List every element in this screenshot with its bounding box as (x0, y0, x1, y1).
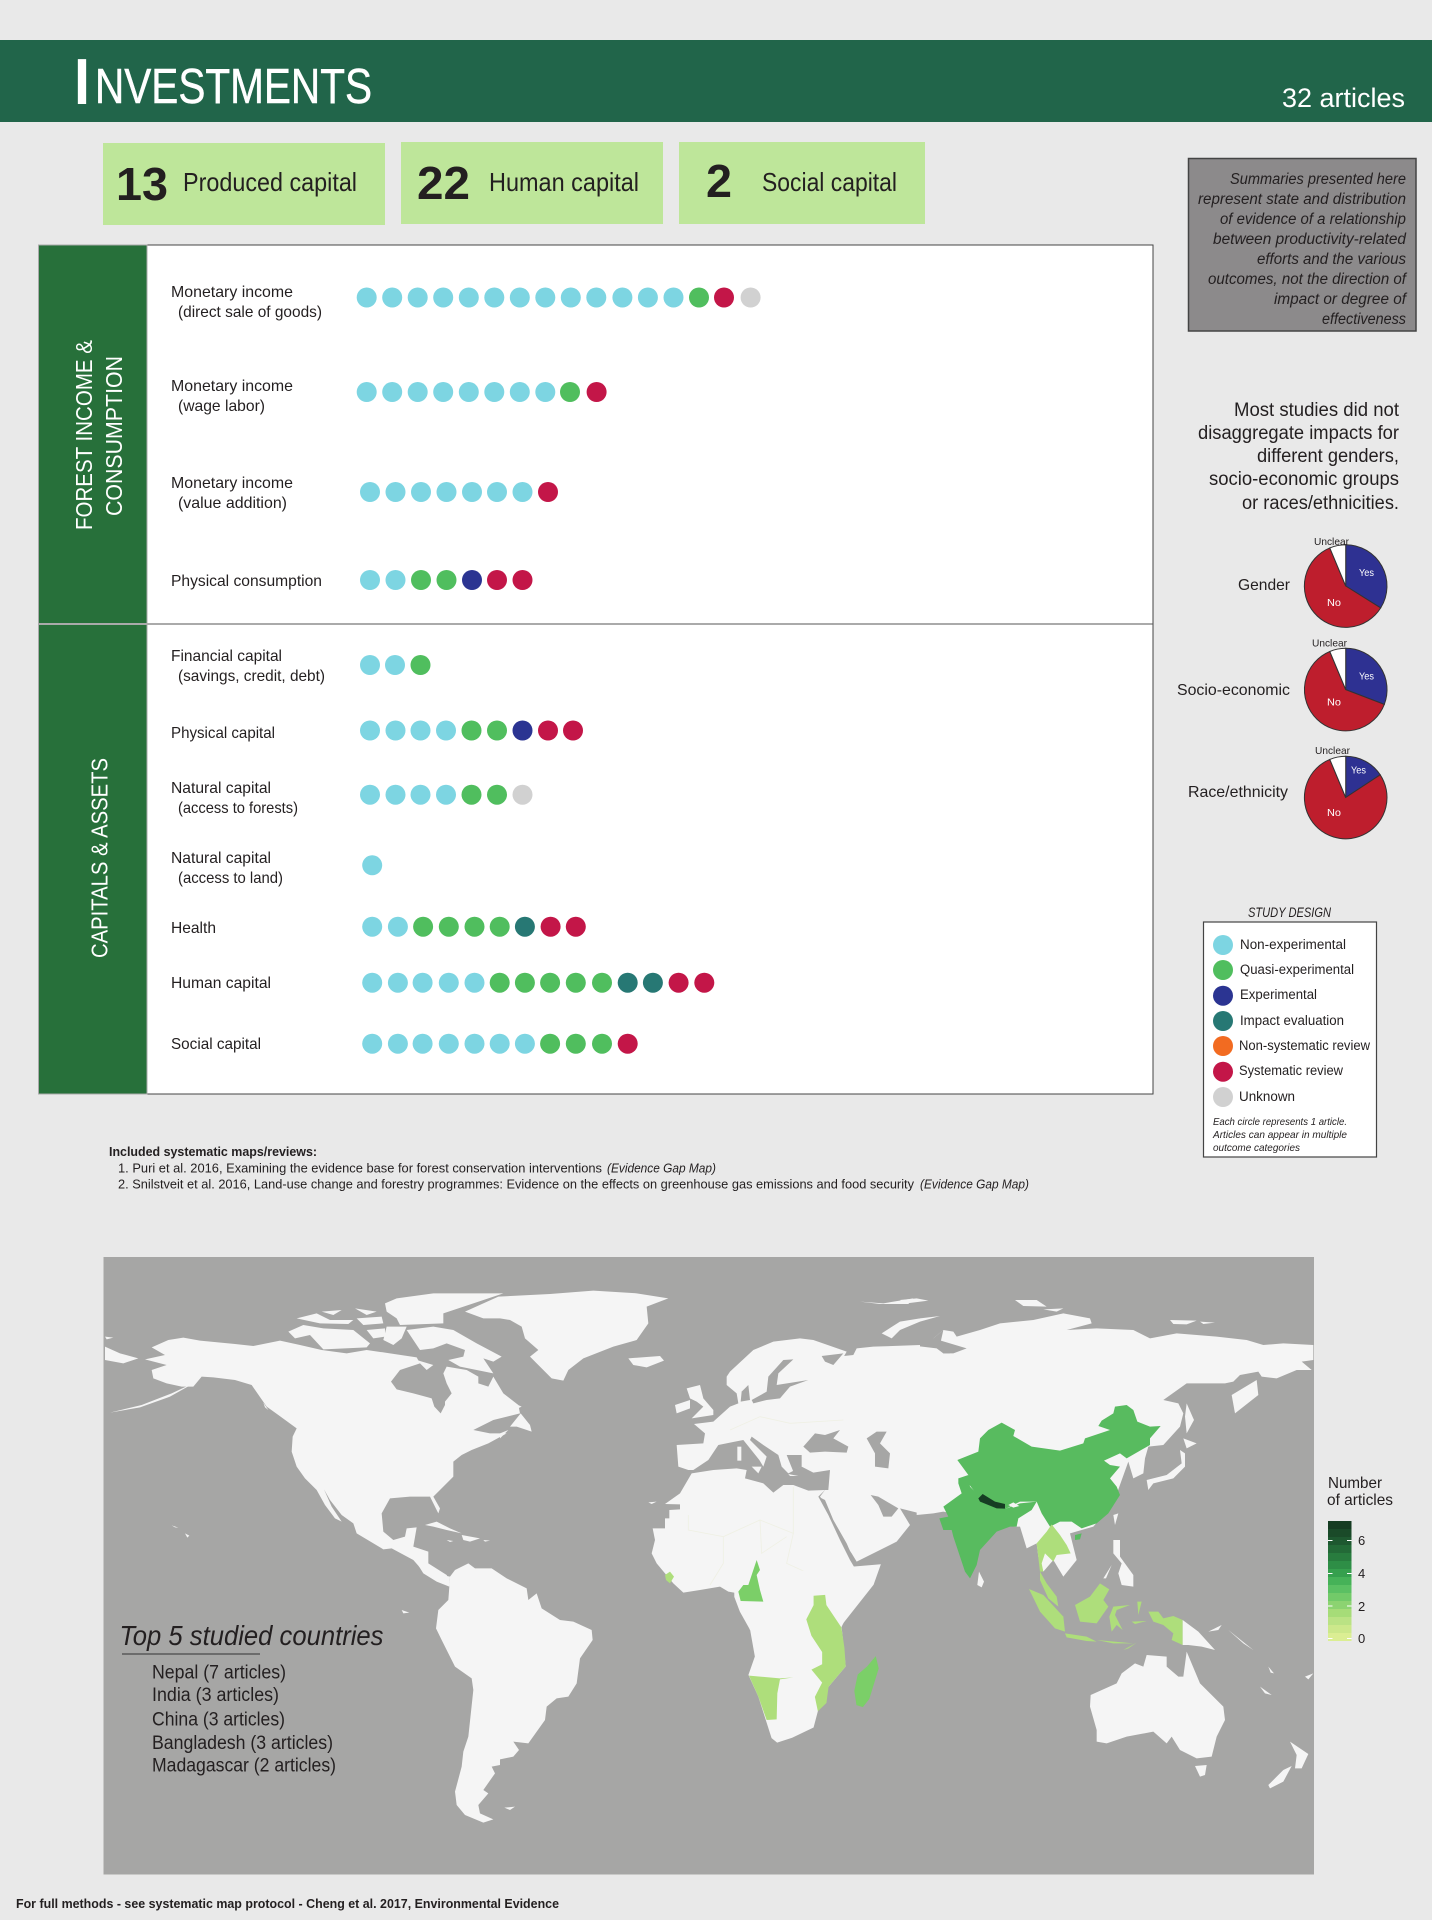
stat box: social capital: Social capital (762, 167, 897, 197)
colour scale: number of articles (1327, 1475, 1393, 1646)
row: monetary income direct sale (171, 284, 761, 321)
map: Greenland, Europe, Africa north, Middle East (465, 1291, 920, 1630)
map: Indonesia and Oceania (1029, 1583, 1313, 1788)
row: monetary income wage labor: (wage labor) (178, 398, 265, 415)
pie chart: race and ethnicity: No (1327, 807, 1341, 819)
map: Asia mainland (917, 1313, 1313, 1577)
row: natural capital forests: (access to forests) (178, 800, 298, 817)
row: financial capital: (savings, credit, debt) (178, 668, 325, 685)
row: physical capital (171, 720, 583, 742)
colour scale: number of articles: 2 (1358, 1599, 1365, 1614)
map: Africa south (734, 1564, 881, 1743)
pie chart: socio-economic: No (1327, 696, 1341, 708)
category: forest income and consumption: CONSUMPTION (101, 356, 127, 516)
map: Sierra Leone and Cameroon (665, 1560, 763, 1602)
included systematic maps and reviews: (Evidence Gap Map) (607, 1160, 716, 1176)
stat box: social capital: 2 (706, 155, 732, 207)
row: social capital (171, 1034, 638, 1054)
legend: study design (1204, 905, 1376, 1157)
map: Nepal (978, 1494, 1005, 1509)
colour scale: number of articles: 0 (1358, 1631, 1365, 1646)
title: NVESTMENTS (95, 60, 372, 114)
evidence table panel (38, 245, 1153, 1094)
row: monetary income direct sale: Monetary income (171, 284, 293, 301)
footer: methods note: For full methods - see systematic map protocol - Cheng et al. 2017, Environmental Evidence (16, 1896, 559, 1911)
category: forest income and consumption: FOREST INCOME & (71, 340, 97, 530)
pie chart: socio-economic: Socio-economic (1177, 682, 1290, 699)
pie chart: socio-economic: Yes (1359, 670, 1374, 682)
colour scale: number of articles: 4 (1358, 1566, 1365, 1581)
pie chart: race and ethnicity: Race/ethnicity (1188, 784, 1288, 801)
pie chart: gender: No (1327, 597, 1341, 609)
disaggregation statement: different genders, (1257, 446, 1399, 467)
row: natural capital forests (171, 780, 532, 817)
legend: study design: Unknown (1239, 1089, 1295, 1104)
top 5 studied countries: India (3 articles) (152, 1685, 279, 1706)
included systematic maps and reviews: Included systematic maps/reviews: (109, 1144, 317, 1159)
map: Americas north (105, 1293, 520, 1582)
legend: study design: Non-experimental (1240, 937, 1346, 952)
stat box: produced capital (103, 143, 385, 225)
row: natural capital land: (access to land) (178, 870, 283, 887)
top 5 studied countries: Madagascar (2 articles) (152, 1756, 336, 1776)
row: monetary income value addition: Monetary income (171, 475, 293, 492)
row: natural capital land (171, 850, 382, 887)
map: China (957, 1405, 1161, 1540)
row: physical capital: Physical capital (171, 725, 275, 742)
callout: summaries note: Summaries presented here (1230, 171, 1406, 188)
row: physical consumption (171, 570, 532, 590)
pie chart: socio-economic: Unclear (1312, 638, 1347, 650)
legend: study design: Experimental (1240, 987, 1317, 1002)
header band (0, 40, 1432, 122)
category: forest income and consumption (38, 245, 147, 624)
row: financial capital (171, 648, 430, 685)
row: monetary income direct sale: (direct sale of goods) (178, 304, 322, 321)
colour scale: number of articles: 6 (1358, 1533, 1365, 1548)
callout: summaries note: between productivity-related (1213, 231, 1407, 248)
callout: summaries note: effectiveness (1322, 311, 1406, 328)
row: monetary income wage labor (171, 378, 607, 415)
row: physical consumption: Physical consumption (171, 573, 322, 590)
stat box: produced capital: Produced capital (183, 167, 357, 197)
included systematic maps and reviews: 1. Puri et al. 2016, Examining the evidence base for forest conservation interventions (118, 1160, 602, 1176)
legend: study design: outcome categories (1213, 1142, 1301, 1154)
legend: study design: Each circle represents 1 article. (1213, 1116, 1347, 1128)
pie chart: gender: Yes (1359, 567, 1374, 579)
pie chart: gender: Unclear (1314, 536, 1349, 548)
pie chart: race and ethnicity (1188, 745, 1387, 839)
disaggregation statement: disaggregate impacts for (1198, 423, 1400, 444)
article count: 32 articles (1282, 83, 1405, 113)
callout: summaries note: efforts and the various (1257, 251, 1406, 268)
top 5 studied countries: China (3 articles) (152, 1710, 285, 1730)
disaggregation statement: Most studies did not (1234, 400, 1400, 421)
row: health (171, 917, 586, 937)
row: human capital: Human capital (171, 975, 271, 992)
top 5 studied countries: Nepal (7 articles) (152, 1662, 286, 1684)
row: monetary income wage labor: Monetary income (171, 378, 293, 395)
callout: summaries note: outcomes, not the direction of (1208, 271, 1408, 288)
disaggregation statement (1198, 400, 1400, 514)
map: India (939, 1475, 1037, 1578)
row: natural capital land: Natural capital (171, 850, 271, 867)
row: natural capital forests: Natural capital (171, 780, 271, 797)
pie chart: race and ethnicity: Unclear (1315, 745, 1350, 757)
row: financial capital: Financial capital (171, 648, 282, 665)
callout: summaries note: impact or degree of (1274, 291, 1408, 308)
stat box: human capital (401, 142, 663, 224)
legend: study design: Systematic review (1239, 1063, 1343, 1078)
colour scale: number of articles: Number (1328, 1475, 1383, 1492)
callout: summaries note (1188, 158, 1416, 331)
top 5 studied countries: Top 5 studied countries (120, 1620, 384, 1651)
map: Namibia (749, 1676, 793, 1720)
legend: study design: Non-systematic review (1239, 1038, 1370, 1053)
stat box: produced capital: 13 (116, 158, 168, 210)
map: South America (402, 1560, 593, 1823)
title (76, 48, 372, 117)
included systematic maps and reviews: 2. Snilstveit et al. 2016, Land-use change and forestry programmes: Evidence on the effects on greenhouse gas emissions and food security (118, 1176, 914, 1192)
legend: study design: Impact evaluation (1240, 1013, 1344, 1028)
legend: study design: Quasi-experimental (1240, 962, 1354, 977)
row: monetary income value addition (171, 475, 558, 512)
map: mainland Southeast Asia (1037, 1524, 1071, 1572)
row: human capital (171, 973, 714, 993)
top 5 studied countries: Bangladesh (3 articles) (152, 1733, 333, 1754)
row: monetary income value addition: (value addition) (178, 495, 287, 512)
pie chart: gender (1238, 536, 1387, 627)
colour scale: number of articles: of articles (1327, 1492, 1393, 1509)
pie chart: gender: Gender (1238, 577, 1291, 594)
callout: summaries note: of evidence of a relationship (1220, 211, 1406, 228)
category: capitals and assets (38, 624, 147, 1094)
world map (104, 1257, 1314, 1874)
legend: study design: STUDY DESIGN (1248, 905, 1331, 920)
stat box: human capital: 22 (417, 157, 470, 209)
legend: study design: Articles can appear in multiple (1212, 1129, 1347, 1141)
map: Asia countries and islands (900, 1298, 1258, 1607)
pie chart: race and ethnicity: Yes (1351, 764, 1366, 776)
included systematic maps and reviews (109, 1144, 1029, 1192)
pie chart: socio-economic (1177, 638, 1387, 731)
disaggregation statement: socio-economic groups (1209, 469, 1399, 490)
category: capitals and assets: CAPITALS & ASSETS (86, 758, 112, 958)
stat box: human capital: Human capital (489, 167, 639, 197)
row: health: Health (171, 920, 216, 937)
disaggregation statement: or races/ethnicities. (1242, 493, 1399, 514)
included systematic maps and reviews: (Evidence Gap Map) (920, 1176, 1029, 1192)
top 5 studied countries (120, 1620, 384, 1776)
row: social capital: Social capital (171, 1036, 261, 1053)
stat box: social capital (679, 142, 925, 224)
title: I (76, 48, 88, 117)
callout: summaries note: represent state and distribution (1198, 191, 1406, 208)
